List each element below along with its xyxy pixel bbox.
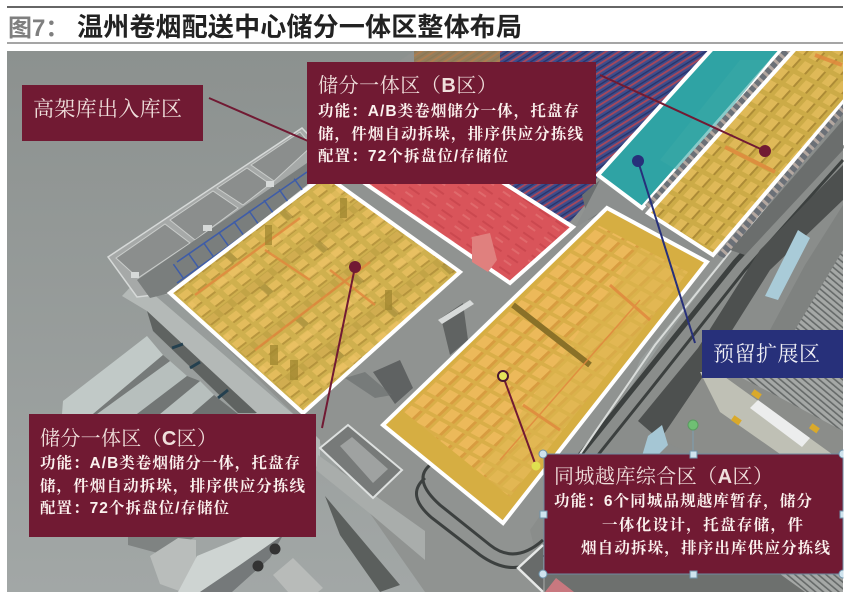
leader: reserved expansion xyxy=(632,155,695,343)
callout: zone B: 功能：A/B类卷烟储分一体，托盘存 xyxy=(318,101,579,121)
title: 图7： xyxy=(8,15,69,42)
leader: zone A xyxy=(498,371,540,470)
header rules xyxy=(7,6,843,44)
leader: zone B xyxy=(600,75,771,157)
zone: B red storage xyxy=(363,182,573,283)
rack wall behind xyxy=(414,51,712,222)
small dock box xyxy=(316,455,425,560)
upper left wall chambers xyxy=(108,128,320,297)
zone: A yellow cross-dock xyxy=(383,208,707,523)
callout: zone B: 储分一体区（B区） xyxy=(318,74,497,97)
callout: zone A xyxy=(544,454,843,574)
callout: high-bay in/out area: 高架库出入库区 xyxy=(33,98,182,121)
building floor xyxy=(137,51,843,592)
callout: zone C: 配置：72个拆盘位/存储位 xyxy=(40,498,229,517)
conveyors xyxy=(416,108,843,568)
machinery area xyxy=(530,100,843,592)
edge stripe right of right zone xyxy=(717,104,843,258)
callout: zone C: 功能：A/B类卷烟储分一体，托盘存 xyxy=(40,453,300,473)
callout: zone A: 一体化设计，托盘存储，件 xyxy=(602,515,803,535)
callout: zone C xyxy=(29,414,316,537)
callout: zone A: 同城越库综合区（A区） xyxy=(554,465,773,488)
sorting lines xyxy=(660,378,843,454)
callout: reserved expansion: 预留扩展区 xyxy=(713,343,820,366)
leader: high-bay xyxy=(209,98,308,141)
title: 温州卷烟配送中心储分一体区整体布局 xyxy=(77,12,522,42)
callout: zone A: 功能：6个同城品规越库暂存，储分 xyxy=(554,491,812,511)
lower-centre curb xyxy=(518,545,543,592)
leader: zone C xyxy=(322,261,361,428)
bottom right strip xyxy=(545,574,843,592)
callout: zone C: 储，件烟自动拆垛，排序供应分拣线 xyxy=(40,476,305,496)
callout: zone A: 烟自动拆垛，排序出库供应分拣线 xyxy=(580,538,830,558)
trucks and docks xyxy=(62,336,163,414)
callout: zone B: 配置：72个拆盘位/存储位 xyxy=(318,146,508,165)
selection handles xyxy=(539,420,847,578)
callout: high-bay in/out area xyxy=(22,85,203,141)
zone: reserved expansion teal xyxy=(598,49,782,208)
wall band xyxy=(122,280,320,470)
zone: C yellow storage xyxy=(170,175,460,413)
floor strip between upper and lower zones xyxy=(575,180,713,262)
zone: right yellow storage xyxy=(648,49,845,255)
edge stripe between teal and right zone xyxy=(645,51,795,212)
callout: reserved expansion xyxy=(702,330,843,378)
callout: zone B: 储，件烟自动拆垛，排序供应分拣线 xyxy=(318,124,583,144)
callout: zone B xyxy=(307,62,596,184)
dark wall panel xyxy=(638,165,843,440)
callout: zone C: 储分一体区（C区） xyxy=(40,427,217,450)
